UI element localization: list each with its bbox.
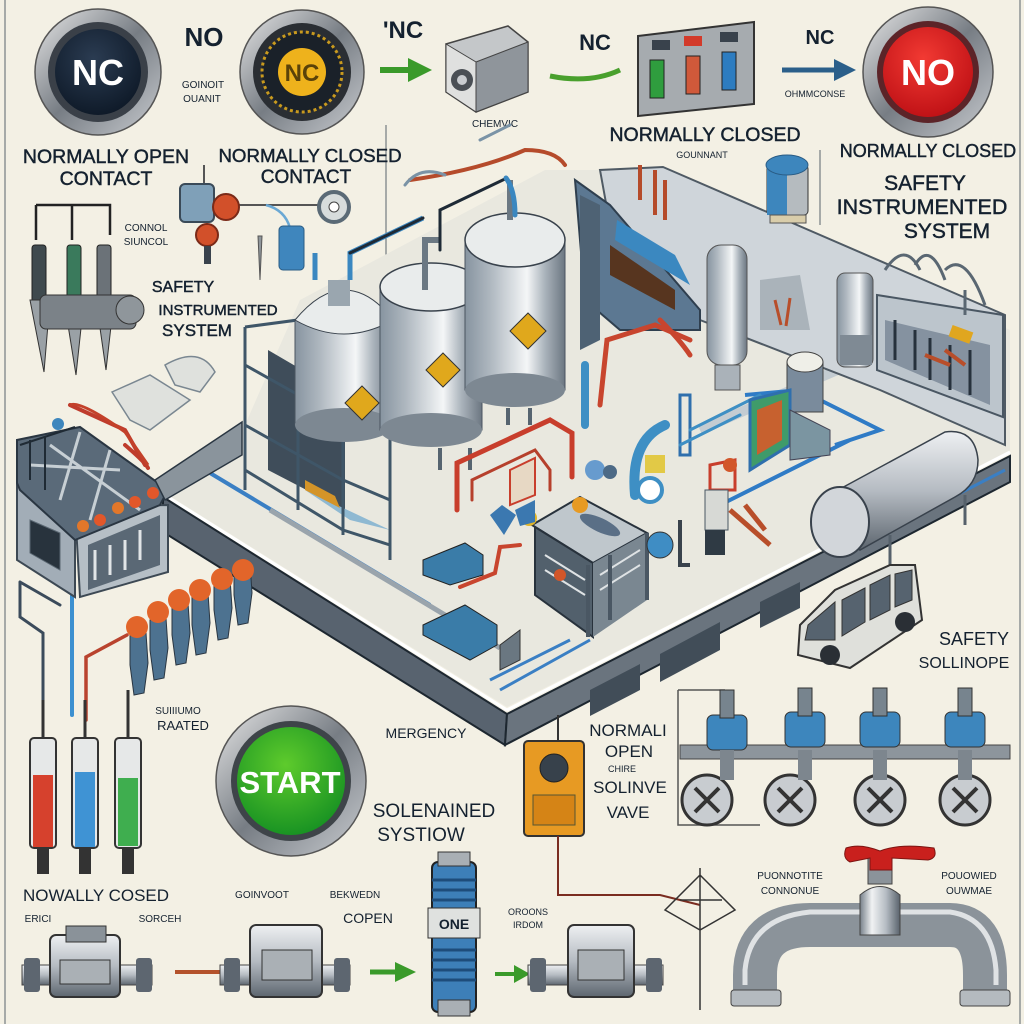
label: copen: COPEN [343,910,393,926]
contactor 2 [175,925,350,997]
caption: faucet right [941,871,997,897]
button: NC navy [35,9,161,135]
scaffold [245,320,390,560]
caption: bottom middle [508,907,548,930]
caption: control signal: CONNOL [125,223,168,234]
heading: safety instrumented system left: SYSTEM [162,321,232,340]
van [798,565,922,668]
heading: safety solenoid: SAFETY [939,629,1009,649]
tank 3 [440,180,565,470]
heading: normally closed contact [218,145,402,188]
caption: bottom middle: IRDOM [513,920,543,930]
solenoid coil [428,852,480,1016]
caption: bottom middle: OROONS [508,907,548,917]
heading: solenoid system: SYSTIOW [377,825,465,846]
pipes: red and blue [20,125,760,720]
caption: control signal: SIUNCOL [124,237,169,248]
label: NC 3: NC [806,27,834,49]
heading: normally open solenoid valve: NORMALI [589,721,667,740]
heading: normally closed bottom: NOWALLY COSED [23,886,169,905]
icon: relay box [446,26,528,112]
arrow: blue [782,59,856,81]
tank 2 [380,240,482,447]
caption chemical: CHEMVIC [472,119,518,130]
faucet pipe [731,846,1010,1006]
icon: sensor probes [30,205,144,375]
arrow: green 3 [495,965,530,983]
caption: faucet left: CONNONUE [761,886,819,897]
heading: normally closed contact: CONTACT [261,167,352,188]
small caption 3: OHMMCONSE [785,89,845,99]
connector wall [155,422,242,500]
captions: bottom left: BEKWEDN [330,890,380,901]
heading: normally open contact [23,146,189,190]
captions: bottom left: SORCEH [139,914,181,925]
heading: safety instrumented system right: INSTRUMENTED [837,195,1007,219]
button: NC navy: NC [72,52,124,93]
heading: normally open contact: CONTACT [60,168,152,190]
small caption 2: OUANIT [183,94,221,105]
heading: normally open contact: NORMALLY OPEN [23,146,189,168]
plant platform [160,170,1010,745]
equipment: center machinery [423,390,830,670]
heading: normally open solenoid valve: OPEN [605,742,653,761]
heading: safety instrumented system right: SAFETY [884,172,966,195]
caption: rated [155,706,209,733]
button: START [216,706,366,856]
heading: normally open solenoid valve: CHIRE [608,764,636,774]
button: NO red [863,7,993,137]
heading: normally open solenoid valve [589,721,667,822]
heading: normally open solenoid valve: VAVE [607,803,649,822]
heading: normally closed center: NORMALLY CLOSED [609,124,801,146]
icon: control panel [638,22,754,116]
back wall [575,165,1005,445]
caption: faucet right: OUWMAE [946,886,992,897]
caption: faucet left [757,871,823,897]
label: NC 2: NC [579,30,611,55]
heading: normally closed right: NORMALLY CLOSED [840,141,1016,161]
icon: row of valves [126,559,254,695]
heading: safety instrumented system right: SYSTEM [904,220,990,243]
contactor 1 [22,926,152,997]
caption: rated: SUIIIUMO [155,706,201,717]
equipment: vessels [707,245,873,412]
test tubes [30,690,141,874]
contactor 3 [528,925,663,997]
captions: bottom left: GOINVOOT [235,890,289,901]
caption: faucet right: POUOWIED [941,871,997,882]
horizontal tank [811,432,978,568]
icon: antenna mast [665,868,735,1010]
icon: small solenoid cluster [180,165,349,280]
valve bank [678,688,1010,825]
caption: rated: RAATED [157,718,209,733]
arrow: green line [550,70,620,79]
caption: control signal [124,223,169,248]
building: left electrical unit [17,404,168,597]
caption under center heading: GOUNNANT [676,150,728,160]
sketch: machine left of scaffold [112,356,215,430]
heading: safety instrumented system left: SAFETY [152,279,214,296]
caption: faucet left: PUONNOTITE [757,871,823,882]
captions: bottom left [25,890,380,925]
label: NO: NO [184,22,224,52]
heading: normally closed contact: NORMALLY CLOSED [218,145,402,166]
button: NO red: NO [901,52,955,93]
heading: solenoid system: SOLENAINED [373,801,495,822]
arrow: green [380,58,432,82]
solenoid coil: ONE [439,916,469,932]
icon: orange control device [524,715,700,905]
label: 'NC: 'NC [383,17,423,44]
arrow: green 2 [370,962,416,982]
heading: normally open solenoid valve: SOLINVE [593,778,667,797]
button: NC amber [240,10,364,134]
heading: solenoid system [373,801,495,846]
heading: safety instrumented system left [152,279,278,340]
caption: emergency: MERGENCY [386,725,467,741]
captions: bottom left: ERICI [25,914,51,925]
heading: safety instrumented system right [837,172,1007,243]
tank 1 [295,218,423,442]
button: START: START [239,765,341,800]
small caption: GOINOIT [182,80,224,91]
icon: blue drum [766,155,808,223]
heading: safety solenoid [919,629,1009,672]
button: NC amber: NC [285,60,319,87]
heading: safety solenoid: SOLLINOPE [919,655,1009,672]
heading: safety instrumented system left: INSTRUMENTED [158,302,278,319]
